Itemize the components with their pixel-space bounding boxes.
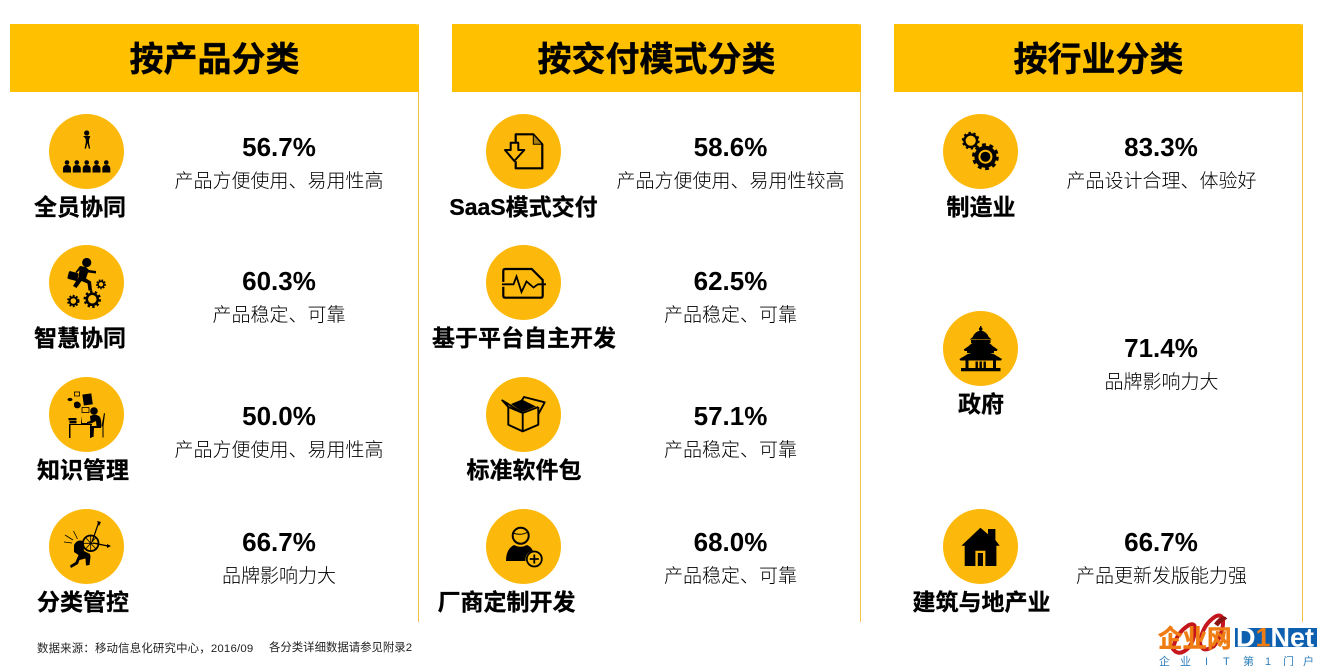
heading: by industry — [894, 24, 1303, 92]
item: vendor customised development — [438, 509, 797, 615]
percentage: 83.3% — [1124, 132, 1198, 162]
item: knowledge management — [37, 377, 384, 483]
description: 产品方便使用、易用性较高 — [616, 171, 845, 192]
percentage: 62.5% — [694, 266, 767, 296]
panel: by industry — [894, 24, 1303, 622]
description: 产品更新发版能力强 — [1076, 566, 1247, 587]
icon: person at desk with documents — [49, 377, 124, 452]
icon: house — [943, 509, 1018, 584]
icon: temple — [943, 311, 1018, 386]
logo: D1Net: D1Net — [1236, 622, 1314, 652]
panel: by delivery mode — [452, 24, 861, 622]
percentage: 66.7% — [242, 527, 316, 557]
icon: man carrying a target with arrows — [49, 509, 124, 584]
percentage: 50.0% — [242, 401, 316, 431]
label: 厂商定制开发 — [438, 589, 576, 615]
label: 基于平台自主开发 — [432, 325, 616, 351]
percentage: 57.1% — [694, 401, 767, 431]
source note: 数据来源：移动信息化研究中心，2016/09 — [37, 643, 253, 655]
label: 分类管控 — [37, 589, 129, 615]
icon: document with pulse line — [486, 245, 561, 320]
label: 标准软件包 — [466, 457, 582, 483]
label: 全员协同 — [34, 194, 126, 220]
icon: user with plus — [486, 509, 561, 584]
heading: by delivery mode — [452, 24, 861, 92]
item: platform-based self development — [432, 245, 797, 351]
heading: by industry: 按行业分类 — [1014, 41, 1184, 79]
item: all-staff collaboration — [34, 114, 384, 220]
item: standard software package — [466, 377, 797, 483]
description: 产品稳定、可靠 — [664, 566, 797, 587]
icon: running man with gears — [49, 245, 124, 320]
percentage: 56.7% — [242, 132, 316, 162]
percentage: 58.6% — [694, 132, 767, 162]
panel: by product — [10, 24, 419, 622]
logo: D1Net — [1158, 614, 1317, 666]
description: 品牌影响力大 — [1104, 372, 1219, 393]
percentage: 68.0% — [694, 527, 767, 557]
description: 产品稳定、可靠 — [212, 305, 346, 326]
icon: document with download arrow — [486, 114, 561, 189]
description: 产品方便使用、易用性高 — [174, 171, 384, 192]
heading: by product — [10, 24, 419, 92]
heading: by delivery mode: 按交付模式分类 — [538, 41, 776, 79]
description: 产品稳定、可靠 — [664, 305, 797, 326]
logo: D1Net: 企业网 — [1158, 625, 1232, 653]
item: smart collaboration — [34, 245, 346, 351]
label: 制造业 — [946, 194, 1016, 220]
item: government — [943, 311, 1219, 417]
label: 知识管理 — [37, 457, 129, 483]
item: construction and real estate — [912, 509, 1247, 615]
icon: gears — [943, 114, 1018, 189]
appendix note: 各分类详细数据请参见附录2 — [269, 642, 412, 654]
heading: by product: 按产品分类 — [130, 41, 300, 79]
label: 政府 — [958, 391, 1004, 417]
label: 建筑与地产业 — [912, 589, 1050, 615]
percentage: 66.7% — [1124, 527, 1198, 557]
item: classified control — [37, 509, 336, 615]
label: SaaS模式交付 — [449, 194, 598, 220]
description: 产品设计合理、体验好 — [1066, 171, 1257, 192]
icon: open box — [486, 377, 561, 452]
description: 产品稳定、可靠 — [664, 440, 797, 461]
icon: person above a group — [49, 114, 124, 189]
description: 品牌影响力大 — [222, 566, 336, 587]
label: 智慧协同 — [34, 325, 126, 351]
percentage: 71.4% — [1124, 333, 1198, 363]
description: 产品方便使用、易用性高 — [174, 440, 384, 461]
item: manufacturing — [943, 114, 1257, 220]
percentage: 60.3% — [242, 266, 316, 296]
item: SaaS delivery — [449, 114, 845, 220]
